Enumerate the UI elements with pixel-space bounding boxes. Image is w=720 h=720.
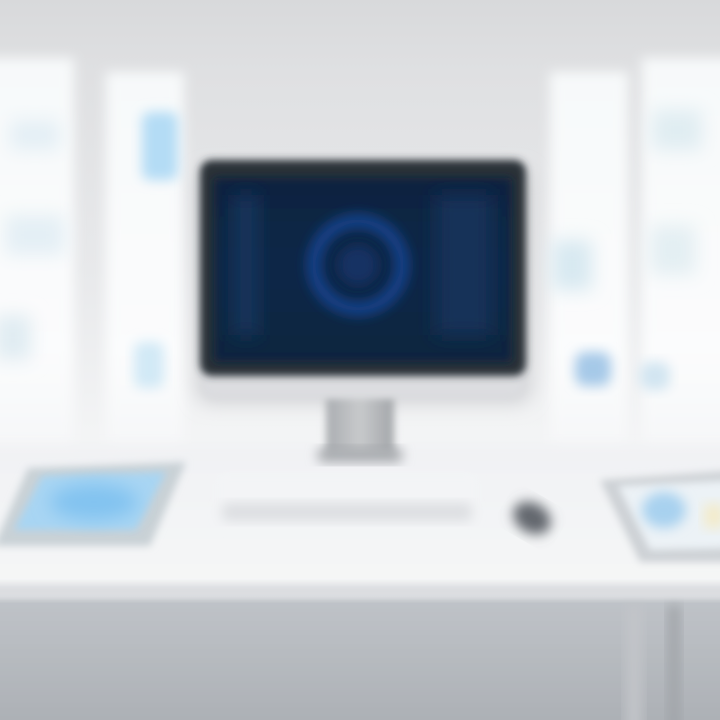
screen circle (314, 221, 402, 309)
panel: desk front (0, 584, 720, 720)
icon: left tablet (0, 462, 186, 546)
monitor screen (214, 178, 512, 362)
icon: keyboard (216, 474, 478, 528)
monitor bezel (200, 160, 526, 376)
monitor stand (318, 395, 402, 462)
panel: left wall screens (0, 58, 184, 448)
screen text columns (234, 195, 492, 335)
icon: mouse (507, 495, 557, 541)
monitor chin (202, 368, 524, 398)
monitor shadow (196, 168, 532, 404)
icon: monitor (196, 160, 532, 462)
icon: right tablet (600, 470, 720, 562)
panel: right wall screens (550, 58, 720, 448)
panel: desk surface (0, 445, 720, 590)
